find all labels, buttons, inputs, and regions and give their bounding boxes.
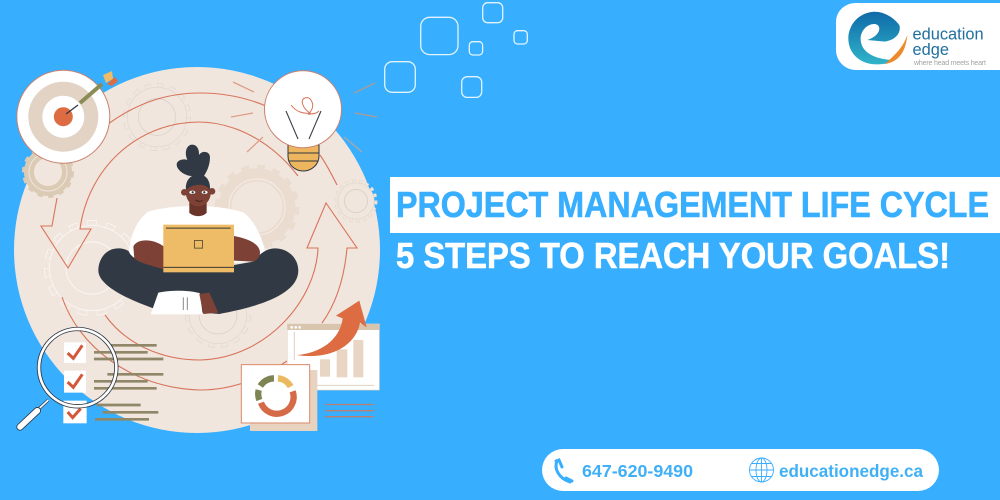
logo tagline: where head meets heart [913,60,986,67]
arms [133,236,260,269]
logo badge [836,3,1000,70]
icon: phone [556,460,572,482]
icon: light bulb [264,71,342,171]
icon: outline gear right [336,181,376,221]
illustration: background circle [14,67,380,433]
donut chart [258,378,294,414]
legs [98,248,298,314]
floating rounded squares [385,3,527,97]
foot lines [183,297,187,310]
icon: tan gear [24,148,72,196]
logo mark [848,12,907,64]
neck [189,200,207,216]
logo badge: edge [912,41,949,59]
contact pill [542,449,939,491]
icon: white outline gear left [46,222,138,314]
chart window with bars and growth arrow [287,301,379,390]
subtitle: 5 STEPS TO REACH YOUR GOALS! [396,235,950,276]
logo wordmark: education [912,26,984,44]
head [181,174,215,206]
icon: target with arrow [17,70,118,163]
donut chart card [241,365,317,431]
torso [129,206,266,268]
text lines under chart [325,404,374,417]
white sock [151,291,203,314]
text lines [94,345,163,419]
growth arrow [297,301,367,356]
phone number: 647-620-9490 [582,461,693,481]
checkbox rows [63,342,87,423]
icon: globe [750,458,774,482]
website: educationedge.ca [779,461,923,481]
icon: outline gear top [125,85,189,149]
rays around bulb [231,82,377,152]
icon: outline gear bottom [187,284,249,346]
icon: large beige gear [217,167,297,247]
cycle arrows: red arcs [41,93,357,390]
hair buns [177,145,210,176]
ankle [199,293,218,314]
checklist with magnifier [20,329,163,427]
magnifier [20,329,116,427]
person: woman with laptop [98,145,298,314]
laptop [163,225,234,272]
check marks [68,345,82,418]
